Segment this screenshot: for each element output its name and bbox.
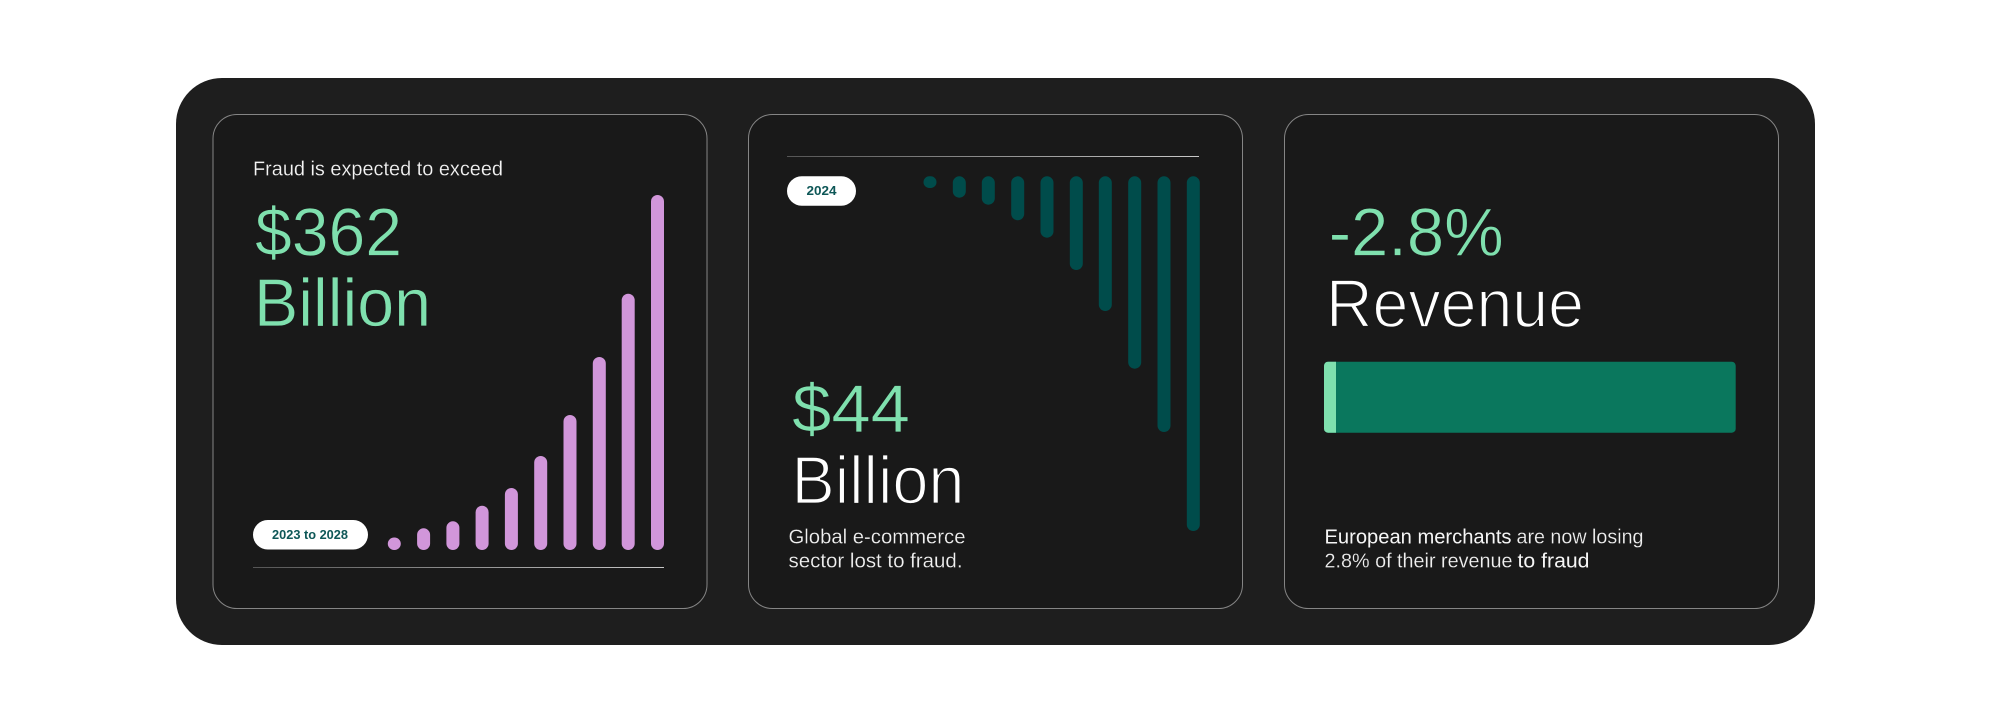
description: 2.8% of their revenue [1324,551,1512,573]
pill: 2023 to 2028: 2023 to 2028 [272,527,348,542]
description: European merchants [1324,526,1512,548]
bar chart: fraud growth 2023 to 2028 [388,195,664,550]
stat: $44: $44 [792,371,910,447]
outer dark panel [176,78,1815,645]
description [1324,526,1644,573]
stat: Billion: Billion [254,265,431,341]
bar chart: hanging bars 2024 [924,176,1200,531]
stat: Revenue: Revenue [1326,266,1584,342]
panel: fraud forecast [213,114,707,608]
stat: $362: $362 [255,194,402,270]
caption: sector lost to fraud. [788,551,962,573]
stat: Billion: Billion [792,442,964,518]
description: to fraud [1518,551,1590,573]
panel: revenue loss [1284,114,1778,608]
pill: 2023 to 2028 [253,520,368,550]
progress bar: 2.8 percent of revenue [1324,362,1736,433]
intro text: Fraud is expected to exceed [253,158,503,180]
pill: 2024: 2024 [806,183,837,198]
description: are now losing [1516,526,1644,548]
panel: 2024 loss [748,114,1242,608]
stat: -2.8%: -2.8% [1329,194,1504,270]
pill: 2024 [787,176,856,206]
caption: Global e-commerce [788,526,966,548]
caption [788,526,966,573]
